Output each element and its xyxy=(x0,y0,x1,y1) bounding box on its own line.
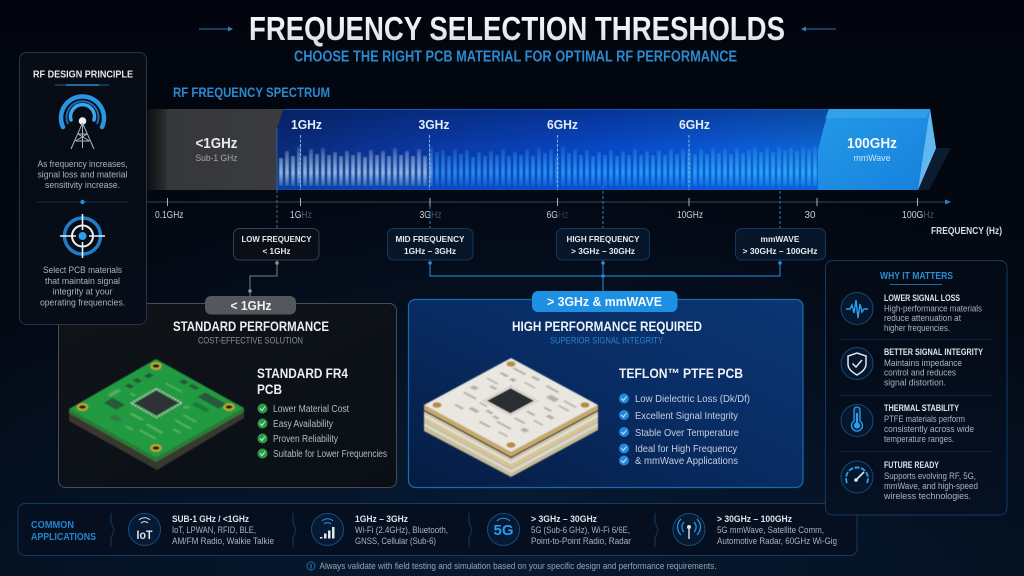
item: better signal integrity: control and reduces xyxy=(884,368,956,378)
text: principle two: integrity at your xyxy=(52,286,112,296)
application: sub-1 GHz: AM/FM Radio, Walkie Talkie xyxy=(172,536,274,546)
application: 1 to 3 GHz: 1GHz – 3GHz xyxy=(355,514,408,524)
heading: common applications: COMMON xyxy=(31,519,74,531)
application: sub-1 GHz: IoT, LPWAN, RFID, BLE, xyxy=(172,525,256,535)
item: lower signal loss: LOWER SIGNAL LOSS xyxy=(884,293,960,303)
text: principle two: Select PCB materials xyxy=(43,265,122,275)
list: PTFE benefits: & mmWave Applications xyxy=(635,455,738,467)
item: thermal stability xyxy=(841,403,974,445)
text: principle two xyxy=(40,265,125,308)
panel: common applications xyxy=(18,504,857,556)
box: mmWave: mmWAVE xyxy=(760,234,800,244)
text: FR4 name: STANDARD FR4 xyxy=(257,366,348,381)
signal bars xyxy=(281,145,815,186)
application: sub-1 GHz: IoT xyxy=(136,528,153,542)
box: high frequency: > 3GHz – 30GHz xyxy=(571,246,635,256)
band: mmWave xyxy=(818,109,951,190)
arrow: title left xyxy=(199,26,233,32)
chart: frequency spectrum bar xyxy=(147,109,951,190)
application: 1 to 3 GHz: GNSS, Cellular (Sub-6) xyxy=(355,536,436,546)
list: FR4 benefits xyxy=(258,404,387,460)
panel: standard performance xyxy=(58,296,396,488)
item: thermal stability: THERMAL STABILITY xyxy=(884,403,959,413)
list: FR4 benefits: Proven Reliability xyxy=(273,434,338,445)
box: low frequency xyxy=(234,228,319,260)
application: 3 to 30 GHz xyxy=(488,514,631,546)
list: PTFE benefits: Low Dielectric Loss (Dk/Df) xyxy=(635,393,750,405)
application: sub-1 GHz xyxy=(128,514,274,546)
list: PTFE benefits: Stable Over Temperature xyxy=(635,427,739,439)
item: better signal integrity: BETTER SIGNAL INTEGRITY xyxy=(884,347,983,357)
chart: frequency axis: 6GHz xyxy=(546,210,568,221)
heading: common applications: APPLICATIONS xyxy=(31,531,96,543)
item: thermal stability: PTFE materials perform xyxy=(884,414,965,425)
chart: frequency axis xyxy=(147,198,1002,237)
badge: below 1 GHz xyxy=(205,296,296,314)
band labels: 3GHz xyxy=(418,117,450,132)
text: principle two: that maintain signal xyxy=(45,276,120,286)
badge: above 3 GHz and mmWave xyxy=(532,291,678,312)
chart: frequency axis: 1GHz xyxy=(290,210,312,221)
arrow: title right xyxy=(801,26,836,32)
application: 1 to 3 GHz: Wi-Fi (2.4GHz), Bluetooth, xyxy=(355,525,448,535)
band: sub-1 GHz: Sub-1 GHz xyxy=(196,153,238,164)
icon: target crosshair xyxy=(60,214,105,258)
heading: standard performance: STANDARD PERFORMANCE xyxy=(173,319,329,334)
item: future ready: FUTURE READY xyxy=(884,460,939,470)
band: sub-1 GHz: <1GHz xyxy=(196,135,238,152)
illustration: FR4 PCB xyxy=(69,359,244,470)
box: mid frequency xyxy=(388,228,473,260)
box: high frequency xyxy=(556,228,650,260)
list: PTFE benefits: Ideal for High Frequency xyxy=(635,443,738,455)
item: future ready: wireless technologies. xyxy=(883,491,971,502)
subtitle: CHOOSE THE RIGHT PCB MATERIAL FOR OPTIMAL RF PERFORMANCE xyxy=(294,48,737,66)
heading: high performance required: HIGH PERFORMANCE REQUIRED xyxy=(512,319,702,334)
item: lower signal loss: reduce attenuation at xyxy=(884,313,961,324)
band: sub-1 GHz xyxy=(147,109,284,190)
chart: frequency axis: 100GHz xyxy=(902,210,934,221)
application: 3 to 30 GHz: Point-to-Point Radio, Radar xyxy=(531,536,631,546)
subheading: cost-effective: COST-EFFECTIVE SOLUTION xyxy=(198,336,303,346)
text: principle one: sensitivity increase. xyxy=(45,180,120,190)
application: sub-1 GHz: SUB-1 GHz / <1GHz xyxy=(172,514,249,524)
band labels: 6GHz xyxy=(679,117,710,132)
box: mmWave xyxy=(736,228,826,260)
box: high frequency: HIGH FREQUENCY xyxy=(566,234,640,244)
box: mid frequency: MID FREQUENCY xyxy=(396,234,465,244)
chart: frequency axis: 10GHz xyxy=(677,210,703,221)
list: FR4 benefits: Suitable for Lower Frequencies xyxy=(273,449,387,460)
list: FR4 benefits: Easy Availability xyxy=(273,419,333,430)
chart: frequency axis: 0.1GHz xyxy=(155,210,184,221)
band labels xyxy=(291,117,710,190)
application: 30 to 100 GHz: 5G mmWave, Satellite Comm, xyxy=(717,525,824,535)
band: blue spectrum xyxy=(277,109,830,190)
heading: common applications xyxy=(31,519,96,543)
band: mmWave: mmWave xyxy=(854,153,890,164)
item: thermal stability: consistently across wide xyxy=(884,424,974,435)
text: FR4 name xyxy=(257,366,348,397)
box: low frequency: < 1GHz xyxy=(262,246,290,256)
icon: antenna tower xyxy=(61,96,104,149)
item: better signal integrity: Maintains impedance xyxy=(884,358,962,369)
box: low frequency: LOW FREQUENCY xyxy=(242,234,312,244)
badge: below 1 GHz: < 1GHz xyxy=(230,298,272,313)
application: 3 to 30 GHz: > 3GHz – 30GHz xyxy=(531,514,597,524)
illustration: PTFE PCB xyxy=(424,358,598,477)
application: 30 to 100 GHz xyxy=(673,514,837,546)
footnote: Always validate with field testing and simulation based on your specific design and performance requirements. xyxy=(320,561,716,571)
box: mmWave: > 30GHz – 100GHz xyxy=(742,246,818,256)
band labels: 1GHz xyxy=(291,117,322,132)
chart: frequency axis: 30 xyxy=(804,210,816,221)
panel: high performance xyxy=(408,291,803,488)
text: principle one: signal loss and material xyxy=(38,170,128,180)
item: lower signal loss: High-performance materials xyxy=(884,304,982,314)
chart: frequency axis: 3GHz xyxy=(420,210,442,221)
title: FREQUENCY SELECTION THRESHOLDS xyxy=(249,10,785,47)
item: better signal integrity xyxy=(841,347,983,388)
subheading: superior signal integrity: SUPERIOR SIGNAL INTEGRITY xyxy=(550,336,664,346)
item: lower signal loss: higher frequencies. xyxy=(884,323,950,334)
band labels: 6GHz xyxy=(547,117,578,132)
box: mid frequency: 1GHz – 3GHz xyxy=(404,246,456,256)
text: principle one: As frequency increases, xyxy=(38,159,128,169)
heading: RF frequency spectrum: RF FREQUENCY SPECTRUM xyxy=(173,84,330,100)
application: 30 to 100 GHz: Automotive Radar, 60GHz Wi-Gig xyxy=(717,536,837,546)
panel: why it matters xyxy=(826,260,1007,515)
application: 3 to 30 GHz: 5G (Sub-6 GHz), Wi-Fi 6/6E, xyxy=(531,525,630,535)
label: frequency (Hz): FREQUENCY (Hz) xyxy=(931,226,1002,237)
text: PTFE name: TEFLON™ PTFE PCB xyxy=(619,366,743,381)
panel: RF design principle xyxy=(20,52,146,324)
application: 30 to 100 GHz: > 30GHz – 100GHz xyxy=(717,514,792,524)
text: FR4 name: PCB xyxy=(257,382,282,397)
text: principle two: operating frequencies. xyxy=(40,298,125,308)
item: future ready: Supports evolving RF, 5G, xyxy=(884,471,976,482)
list: PTFE benefits xyxy=(619,393,750,467)
text: principle one xyxy=(38,159,128,190)
connectors: axis to range boxes xyxy=(248,186,782,296)
application: 3 to 30 GHz: 5G xyxy=(494,522,514,539)
item: future ready xyxy=(841,460,978,502)
heading: why it matters: WHY IT MATTERS xyxy=(880,271,953,282)
list: PTFE benefits: Excellent Signal Integrity xyxy=(635,410,739,422)
application: 1 to 3 GHz xyxy=(312,514,448,546)
item: better signal integrity: signal distortion. xyxy=(884,378,946,388)
item: thermal stability: temperature ranges. xyxy=(884,434,954,445)
badge: above 3 GHz and mmWave: > 3GHz & mmWAVE xyxy=(547,294,662,309)
heading: RF design principle: RF DESIGN PRINCIPLE xyxy=(33,70,133,80)
list: FR4 benefits: Lower Material Cost xyxy=(273,404,349,415)
item: future ready: mmWave, and high-speed xyxy=(884,481,978,492)
item: lower signal loss xyxy=(841,292,982,334)
band: mmWave: 100GHz xyxy=(847,135,897,152)
